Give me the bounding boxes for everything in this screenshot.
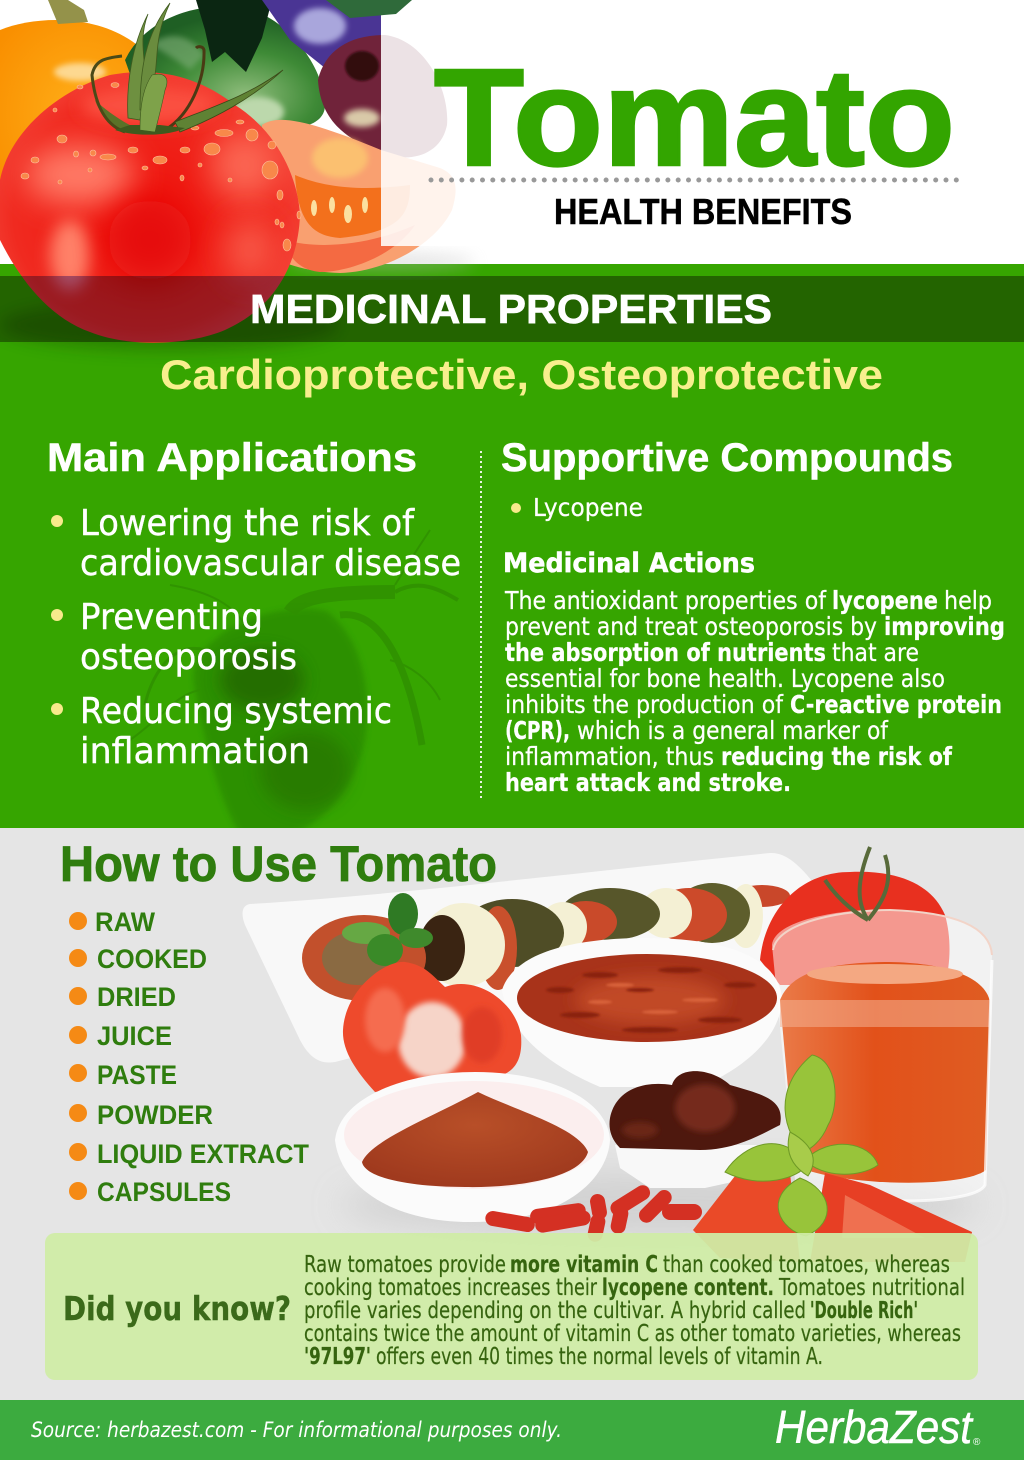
image: plated slices bbox=[302, 883, 790, 1001]
list: forms of use: PASTE bbox=[97, 1060, 177, 1090]
text: bullet 1: cardiovascular disease bbox=[80, 543, 461, 584]
panel: footer bbox=[0, 1400, 1024, 1460]
text: did you know paragraph: lycopene content. bbox=[602, 1273, 774, 1301]
panel: did you know bbox=[45, 1233, 978, 1380]
panel: green medicinal section bbox=[0, 264, 1024, 828]
text: did you know paragraph: Raw tomatoes provide bbox=[304, 1250, 506, 1278]
list: forms of use: POWDER bbox=[97, 1100, 213, 1130]
icon: water drops bbox=[21, 82, 301, 251]
icon: tomato calyx bbox=[92, 3, 283, 135]
image: tomatoes header bbox=[0, 0, 481, 351]
image: orange tomato bbox=[0, 0, 150, 190]
text: medicinal actions paragraph: which is a general marker of bbox=[577, 716, 889, 745]
text: bullet 3 bbox=[80, 691, 392, 772]
logo: HerbaZest: ® bbox=[973, 1437, 981, 1448]
list: compounds: Lycopene bbox=[533, 493, 643, 522]
list: forms of use bbox=[69, 907, 309, 1207]
image: juice glass bbox=[772, 910, 992, 1201]
text: medicinal actions paragraph: the absorption of nutrients bbox=[505, 638, 826, 667]
text: medicinal actions paragraph: reducing the risk of bbox=[721, 742, 952, 771]
text: medicinal actions paragraph: inhibits the production of bbox=[505, 690, 784, 719]
text: did you know paragraph bbox=[304, 1250, 965, 1370]
bullet 2 bbox=[51, 609, 63, 621]
bullet 3 bbox=[51, 703, 63, 715]
text: bullet 2 bbox=[80, 597, 297, 678]
shadow: tomato on band bbox=[0, 299, 340, 351]
text: medicinal actions paragraph bbox=[504, 586, 1005, 797]
image: whole tomato behind glass bbox=[760, 872, 950, 985]
image: dried tomatoes dish bbox=[609, 1071, 782, 1188]
text: medicinal actions paragraph: improving bbox=[884, 612, 1005, 641]
image: white plate bbox=[243, 853, 815, 1063]
image: halved tomato bbox=[343, 962, 521, 1092]
list: forms of use: DRIED bbox=[97, 982, 176, 1012]
heading: how to use tomato: How to Use Tomato bbox=[60, 836, 497, 892]
divider: column separator bbox=[480, 451, 482, 798]
list: forms of use: CAPSULES bbox=[97, 1177, 231, 1207]
heading: properties list: Cardioprotective, Osteoprotective bbox=[160, 351, 883, 398]
text: bullet 3: inflammation bbox=[80, 731, 310, 772]
divider dots bbox=[431, 178, 960, 182]
text: did you know paragraph: profile varies depending on the cultivar. A hybrid called bbox=[304, 1296, 806, 1324]
list: forms of use: RAW bbox=[95, 907, 155, 937]
text: did you know paragraph: '97L97' bbox=[304, 1342, 371, 1370]
image: capsules bbox=[484, 1182, 702, 1243]
image: tomato wedge bbox=[262, 120, 475, 273]
text: medicinal actions paragraph: heart attack and stroke. bbox=[505, 768, 791, 797]
text: bullet 1 bbox=[80, 503, 461, 584]
image: tomato wedges bbox=[693, 1173, 972, 1262]
heading: medicinal actions: Medicinal Actions bbox=[503, 548, 755, 579]
band: medicinal properties dark strip bbox=[0, 276, 1024, 342]
text: medicinal actions paragraph: prevent and treat osteoporosis by bbox=[505, 612, 877, 641]
text: medicinal actions paragraph: that are bbox=[832, 638, 919, 667]
image: main red tomato bbox=[0, 3, 301, 343]
shadow: foods bbox=[340, 1171, 980, 1239]
image: sauce bowl bbox=[502, 938, 782, 1087]
text: medicinal actions paragraph: The antioxidant properties of bbox=[504, 586, 827, 615]
image: basil leaves bbox=[725, 1055, 878, 1236]
heading: supportive compounds: Supportive Compounds bbox=[501, 436, 953, 480]
text: did you know paragraph: more vitamin C bbox=[510, 1250, 658, 1278]
text: did you know paragraph: 'Double Rich' bbox=[810, 1296, 918, 1324]
bullet 1 bbox=[51, 515, 63, 527]
list: forms of use: LIQUID EXTRACT bbox=[97, 1139, 309, 1169]
image: heart watermark bbox=[130, 530, 458, 835]
text: medicinal actions paragraph: essential for bone health. Lycopene also bbox=[505, 664, 945, 693]
subtitle: HEALTH BENEFITS bbox=[554, 191, 852, 232]
text: medicinal actions paragraph: (CPR), bbox=[505, 716, 570, 745]
text: bullet 2: osteoporosis bbox=[80, 637, 297, 678]
text: medicinal actions paragraph: inflammation, thus bbox=[505, 742, 714, 771]
heading: medicinal properties: MEDICINAL PROPERTIES bbox=[250, 286, 772, 332]
list: main applications bbox=[51, 503, 461, 772]
list: forms of use: COOKED bbox=[97, 944, 207, 974]
text: did you know paragraph: offers even 40 times the normal levels of vitamin A. bbox=[376, 1342, 823, 1370]
text: bullet 1: Lowering the risk of bbox=[80, 503, 415, 544]
text: did you know paragraph: Tomatoes nutritional bbox=[778, 1273, 965, 1301]
image: purple tomato bbox=[262, 0, 447, 157]
text: did you know paragraph: cooking tomatoes increases their bbox=[304, 1273, 597, 1301]
text: bullet 2: Preventing bbox=[80, 597, 263, 638]
panel: grey how to use section bbox=[0, 828, 1024, 1400]
title: Tomato bbox=[434, 41, 955, 195]
image: green tomato bbox=[125, 0, 325, 130]
overlay: white fade panel bbox=[381, 24, 481, 246]
image: mint sprig bbox=[342, 893, 433, 966]
text: bullet 3: Reducing systemic bbox=[80, 691, 392, 732]
list: forms of use: JUICE bbox=[97, 1021, 172, 1051]
heading: did you know: Did you know? bbox=[63, 1289, 291, 1328]
text: source: Source: herbazest.com - For informational purposes only. bbox=[31, 1418, 562, 1442]
image: powder bowl bbox=[335, 1072, 610, 1222]
heading: main applications: Main Applications bbox=[47, 436, 417, 480]
icon: tomato stem bbox=[825, 847, 888, 920]
logo: HerbaZest: HerbaZest bbox=[775, 1401, 974, 1453]
text: medicinal actions paragraph: lycopene bbox=[832, 586, 938, 615]
image: tomato foods bbox=[243, 847, 992, 1262]
text: medicinal actions paragraph: help bbox=[944, 586, 992, 615]
